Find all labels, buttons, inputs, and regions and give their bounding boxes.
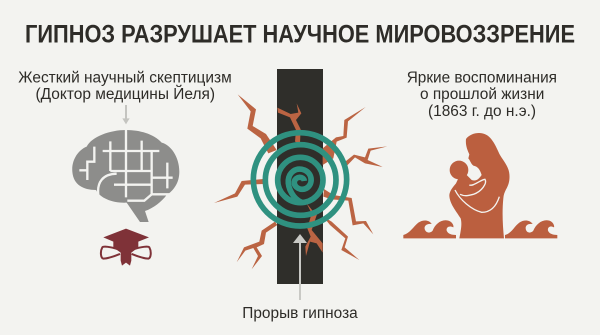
text: vivid memories (407, 69, 557, 120)
text: scientific skepticism: Жесткий научный скептицизм (18, 69, 232, 86)
arrow: breakthrough (293, 234, 307, 300)
text: scientific skepticism (18, 69, 232, 103)
text: vivid memories: Яркие воспоминания (407, 69, 557, 86)
central bar (277, 69, 323, 284)
icon: mother and child (449, 133, 510, 238)
spiral rings (253, 133, 347, 226)
text: vivid memories: о прошлой жизни (420, 86, 544, 103)
text: scientific skepticism: (Доктор медицины Йеля) (36, 85, 215, 103)
icon: brain (72, 130, 179, 222)
icon: graduation cap and diploma (101, 229, 151, 266)
text: vivid memories: (1863 г. до н.э.) (428, 103, 536, 120)
icon: left waves (403, 220, 456, 238)
icon: right waves (505, 220, 557, 238)
arrow: to brain (122, 105, 130, 124)
text: hypnosis breakthrough: Прорыв гипноза (242, 305, 358, 322)
cracks (214, 94, 387, 269)
